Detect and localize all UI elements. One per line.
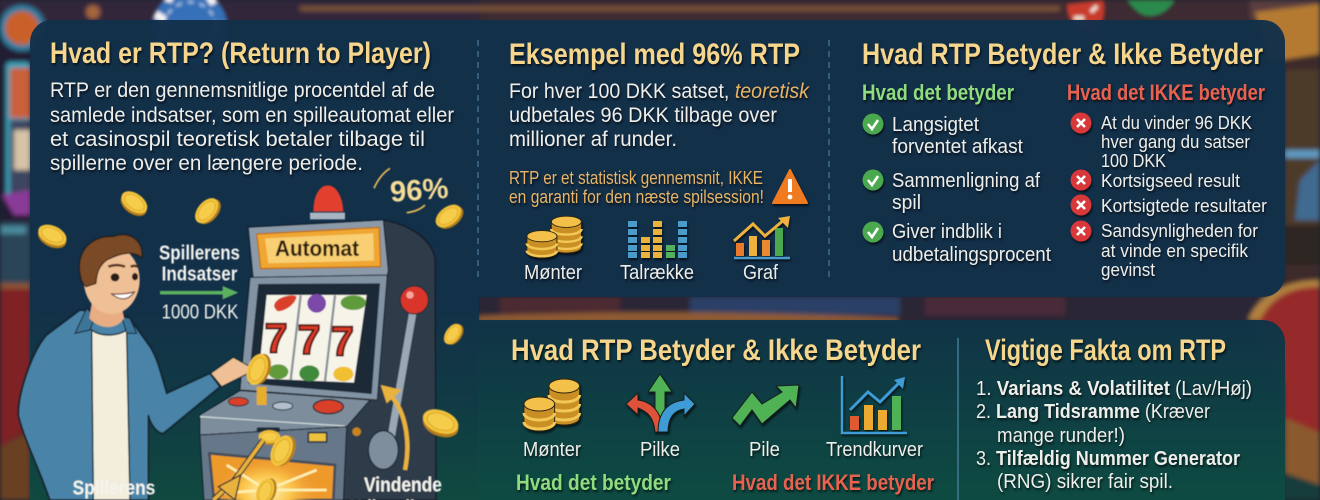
list: facts: 1. Varians & Volatilitet (Lav/Høj): [976, 378, 1252, 400]
icon labels: Pilke: [640, 439, 680, 461]
list: does not mean: Sandsynligheden for: [1101, 220, 1258, 241]
icon: number bars: [628, 221, 687, 258]
icon: trend chart: [842, 376, 907, 433]
list: means: [862, 114, 1051, 266]
panel: important facts: [976, 334, 1252, 493]
list: facts: 3. Tilfældig Nummer Generator: [976, 448, 1240, 470]
subheading: lower what it means: Hvad det betyder: [516, 470, 671, 495]
list: means: Sammenligning af: [892, 170, 1040, 192]
label: player stakes: Spillerens: [159, 242, 240, 264]
list: does not mean: at vinde en specifik: [1101, 240, 1249, 261]
reels 777: 7: [298, 317, 321, 363]
list: means: Langsigtet: [892, 114, 979, 136]
subheading: what it means: Hvad det betyder: [862, 80, 1014, 105]
heading: lower means and does not mean: Hvad RTP Betyder & Ikke Betyder: [511, 334, 921, 367]
text block: example explanation: udbetales 96 DKK tilbage over: [509, 103, 777, 127]
panel: lower icons and meanings: [511, 334, 934, 495]
icon labels: Mønter: [524, 262, 582, 284]
list: does not mean: 100 DKK: [1101, 150, 1167, 171]
reels 777: [265, 316, 354, 364]
arrow: winnings returning: [388, 393, 407, 470]
text block: example explanation: [509, 79, 810, 151]
icon: coin stacks: [524, 379, 580, 431]
panel: lower information panel: [478, 320, 1285, 500]
panel: example with 96 percent: [509, 38, 810, 284]
text block: example explanation: For hver 100 DKK satset, teoretisk: [509, 79, 810, 103]
heading: what is RTP: Hvad er RTP? (Return to Player): [50, 37, 431, 70]
icon: warning triangle: [773, 170, 807, 203]
label: player stakes: 1000 DKK: [162, 301, 239, 323]
icon labels: Talrække: [620, 262, 694, 284]
list: facts: mange runder!): [997, 425, 1125, 447]
callout: statistical warning: en garanti for den næste spilsession!: [509, 187, 764, 207]
text block: RTP definition: spillerne over en længere periode.: [50, 151, 363, 175]
panel: what RTP means and does not mean: [862, 38, 1267, 280]
icon labels: Trendkurver: [826, 439, 923, 461]
text block: RTP definition: samlede indsatser, som en spilleautomat eller: [50, 103, 454, 127]
label: 96 percent: 96%: [389, 172, 449, 209]
list: does not mean: hver gang du satser: [1101, 131, 1250, 152]
text block: RTP definition: RTP er den gennemsnitlige procentdel af de: [50, 78, 435, 102]
list: means: Giver indblik i: [892, 221, 1002, 243]
callout: statistical warning: RTP er et statistisk gennemsnit, IKKE: [509, 168, 763, 188]
text block: RTP definition: et casinospil teoretisk betaler tilbage til: [50, 127, 425, 151]
list: facts: 2. Lang Tidsramme (Kræver: [976, 401, 1210, 423]
icon labels: Mønter: [523, 439, 581, 461]
heading: important facts: Vigtige Fakta om RTP: [985, 334, 1226, 367]
subheading: what it does not mean: Hvad det IKKE betyder: [1067, 80, 1265, 105]
label: player stakes: [159, 242, 240, 323]
slot machine: [200, 185, 436, 500]
list: facts: [976, 378, 1252, 493]
reels 777: 7: [331, 318, 354, 364]
text block: example explanation: millioner af runder.: [509, 127, 677, 151]
label: player stakes: Indsatser: [162, 264, 238, 286]
heading: example: Eksempel med 96% RTP: [509, 38, 800, 71]
casino chips at top edge: [152, 0, 1175, 66]
icon labels: [524, 262, 778, 284]
list: means: spil: [892, 192, 921, 214]
panel: what is RTP heading and text: [50, 37, 454, 175]
label: 96 percent: [374, 168, 449, 213]
icon labels: Graf: [743, 262, 778, 284]
label: winning payouts: Vindende: [364, 474, 442, 496]
subheading: lower what it does not mean: Hvad det IKKE betyder: [732, 470, 934, 495]
divider: middle column: [828, 40, 830, 282]
list: does not mean: Kortsigseed result: [1101, 170, 1240, 191]
callout: statistical warning: [509, 168, 764, 207]
divider: left column: [477, 40, 479, 282]
label: Automat: Automat: [275, 236, 360, 261]
icon: split arrows: [626, 374, 695, 432]
icon labels: Pile: [749, 439, 780, 461]
list: means: udbetalingsprocent: [892, 244, 1051, 266]
list: does not mean: [1070, 112, 1267, 280]
list: means: forventet afkast: [892, 136, 1023, 158]
coin in hand: [243, 350, 275, 389]
list: does not mean: At du vinder 96 DKK: [1101, 112, 1253, 133]
player figure: [18, 235, 275, 500]
list: does not mean: Kortsigtede resultater: [1101, 195, 1267, 216]
icon: graph: [734, 216, 790, 258]
icon: rising zigzag arrow: [732, 385, 799, 426]
divider: lower panel: [957, 338, 959, 500]
list: does not mean: gevinst: [1101, 259, 1155, 280]
coins in the air: [34, 187, 468, 442]
arrow: stake going in: [160, 286, 238, 299]
reels 777: 7: [265, 316, 288, 362]
icon labels: [523, 439, 923, 461]
list: facts: (RNG) sikrer fair spil.: [997, 471, 1173, 493]
illustration: player at slot machine: [18, 168, 468, 500]
label: player: Spillerens: [73, 478, 155, 500]
icon: coins: [527, 216, 581, 258]
text block: RTP definition: [50, 78, 454, 175]
